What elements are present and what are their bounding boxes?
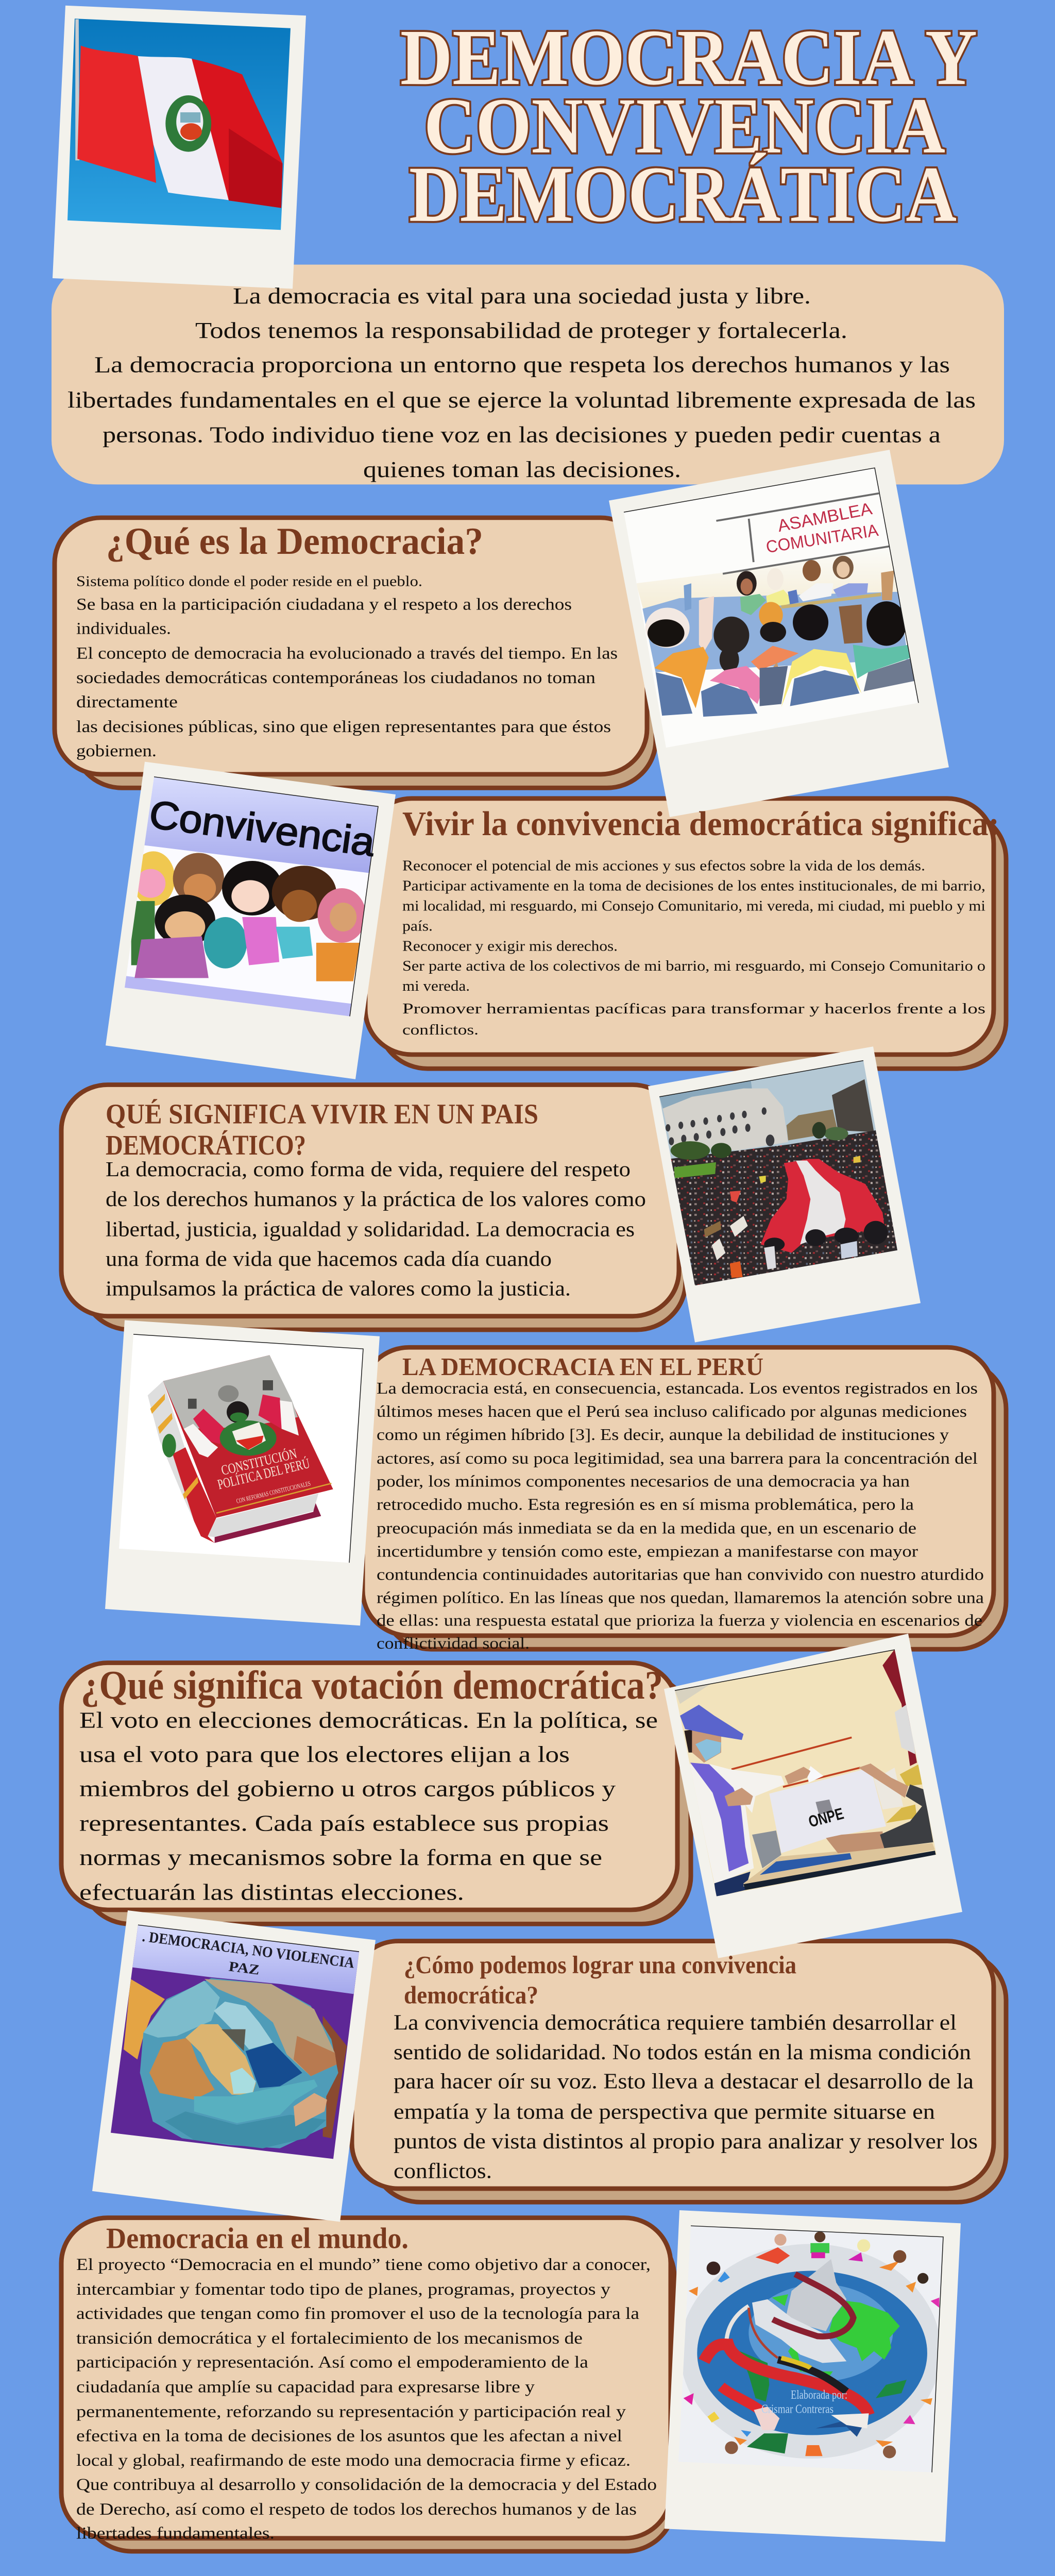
- text block: qué significa vivir: de los derechos humanos y la práctica de los valores como: [106, 1187, 646, 1211]
- text block: qué es la democracia: sociedades democráticas contemporáneas los ciudadanos no toman: [76, 669, 595, 687]
- heading: cómo lograr una convivencia democrática: ¿Cómo podemos lograr una convivencia: [404, 1951, 796, 1979]
- photo: asamblea comunitaria polaroid: [609, 450, 949, 817]
- heading: Qué significa vivir en un país democrático: QUÉ SIGNIFICA VIVIR EN UN PAIS: [106, 1098, 538, 1130]
- photo: ONPE voting polaroid: [664, 1634, 962, 1958]
- image text: elaborada por: Crismar Contreras: [761, 2402, 833, 2416]
- ballot box text: ONPE: ONPE: [806, 1804, 845, 1831]
- text block: la democracia en el Perú: de ellas: una respuesta estatal que prioriza la fuerza y violencia en escenarios de: [377, 1612, 982, 1629]
- text block: qué es la democracia: Se basa en la participación ciudadana y el respeto a los derechos: [76, 596, 572, 614]
- text block: qué significa vivir: libertad, justicia, igualdad y solidaridad. La democracia es: [106, 1217, 635, 1241]
- text block: qué es la democracia: gobiernen.: [76, 742, 157, 760]
- text block: democracia en el mundo: efectiva en la toma de decisiones de los asuntos que les afectan a nivel: [76, 2427, 622, 2445]
- book cover text: POLÍTICA DEL PERÚ: [216, 1455, 311, 1492]
- text block: intro: [67, 283, 976, 482]
- panel: democracia en el mundo card: [61, 2218, 674, 2551]
- panel: Qué significa vivir card: [61, 1084, 686, 1330]
- text block: la democracia en el Perú: últimos meses hacen que el Perú sea incluso calificado por algunas mediciones: [377, 1402, 967, 1420]
- text block: votación democrática: efectuarán las distintas elecciones.: [79, 1879, 464, 1905]
- text block: cómo lograr convivencia: conflictos.: [394, 2159, 492, 2183]
- text block: democracia en el mundo: actividades que tengan como fin promover el uso de la tecnología para la: [76, 2304, 639, 2323]
- photo: constitution book polaroid: [105, 1320, 380, 1625]
- text block: cómo lograr convivencia: puntos de vista distintos al propio para analizar y resolver los: [394, 2129, 978, 2154]
- text block: democracia en el mundo: de Derecho, así como el respeto de todos los derechos humanos y de las: [76, 2500, 637, 2519]
- text block: qué es la democracia: [76, 573, 618, 760]
- text block: vivir la convivencia: Ser parte activa de los colectivos de mi barrio, mi resguardo, mi Consejo Comunitario o: [402, 958, 985, 974]
- text block: cómo lograr convivencia: [394, 2011, 978, 2183]
- text block: democracia en el mundo: Que contribuya al desarrollo y consolidación de la democracia y del Estado: [76, 2475, 657, 2494]
- photo: Peruvian flag polaroid: [53, 6, 306, 289]
- text block: la democracia en el Perú: contundencia continuidades autoritarias que han convivido con nuestro aturdido: [377, 1566, 984, 1583]
- text block: qué significa vivir: La democracia, como forma de vida, requiere del respeto: [106, 1158, 631, 1181]
- title: [400, 13, 977, 238]
- text block: la democracia en el Perú: poder, los mínimos componentes necesarios de una democracia ya han: [377, 1472, 910, 1490]
- text block: democracia en el mundo: El proyecto “Democracia en el mundo” tiene como objetivo dar a conocer,: [76, 2256, 651, 2274]
- text block: la democracia en el Perú: La democracia está, en consecuencia, estancada. Los eventos registrados en los: [377, 1379, 978, 1397]
- text block: votación democrática: El voto en elecciones democráticas. En la política, se: [79, 1707, 658, 1733]
- text block: qué es la democracia: individuales.: [76, 620, 171, 638]
- text block: la democracia en el Perú: como un régimen híbrido [3]. Es decir, aunque la debilidad de instituciones y: [377, 1426, 949, 1444]
- panel: Vivir la convivencia card: [365, 799, 1006, 1069]
- text block: la democracia en el Perú: preocupación más inmediata se da en la medida que, en un escenario de: [377, 1519, 916, 1537]
- text block: democracia en el mundo: local y global, reafirmando de este modo una democracia firme y eficaz.: [76, 2451, 631, 2470]
- text block: democracia en el mundo: intercambiar y fomentar todo tipo de planes, programas, proyectos y: [76, 2280, 610, 2299]
- text block: qué significa vivir: impulsamos la práctica de valores como la justicia.: [106, 1277, 571, 1300]
- heading: Democracia en el mundo: Democracia en el mundo.: [106, 2223, 409, 2255]
- text block: cómo lograr convivencia: para hacer oír su voz. Esto lleva a destacar el desarrollo de la: [394, 2070, 974, 2094]
- text block: vivir la convivencia: Promover herramientas pacíficas para transformar y hacerlos frente a los: [402, 1001, 985, 1017]
- book cover text: CON REFORMAS CONSTITUCIONALES: [235, 1480, 311, 1505]
- text block: votación democrática: miembros del gobierno u otros cargos públicos y: [79, 1775, 616, 1801]
- text block: la democracia en el Perú: retrocedido mucho. Esta regresión es en sí misma problemática, pero la: [377, 1496, 914, 1514]
- book cover text: CONSTITUCIÓN: [219, 1445, 298, 1478]
- text block: democracia en el mundo: [76, 2256, 657, 2543]
- text block: vivir la convivencia: Participar activamente en la toma de decisiones de los entes institucionales, de mi barrio,: [402, 878, 985, 894]
- text block: democracia en el mundo: ciudadanía que amplíe su capacidad para expresarse libre y: [76, 2378, 535, 2396]
- text block: la democracia en el Perú: actores, así como su poca legitimidad, sea una barrera para la concentración del: [377, 1449, 978, 1467]
- text block: la democracia en el Perú: conflictividad social.: [377, 1635, 530, 1652]
- text block: intro: quienes toman las decisiones.: [363, 456, 681, 482]
- text block: qué significa vivir: [106, 1158, 646, 1300]
- heading: ¿Qué es la Democracia?: ¿Qué es la Democracia?: [106, 520, 483, 563]
- text block: intro: personas. Todo individuo tiene voz en las decisiones y pueden pedir cuentas a: [103, 422, 941, 447]
- text block: vivir la convivencia: mi vereda.: [402, 978, 470, 994]
- text block: votación democrática: normas y mecanismos sobre la forma en que se: [79, 1844, 602, 1870]
- text block: qué es la democracia: las decisiones públicas, sino que eligen representantes para que éstos: [76, 718, 611, 736]
- image text: elaborada por: Elaborada por:: [791, 2388, 847, 2402]
- text block: intro: Todos tenemos la responsabilidad de proteger y fortalecerla.: [195, 318, 847, 343]
- heading: La democracia en el Perú: LA DEMOCRACIA EN EL PERÚ: [402, 1352, 763, 1381]
- image text: Convivencia: Convivencia: [147, 792, 377, 865]
- heading: cómo lograr una convivencia democrática: democrática?: [404, 1981, 538, 2009]
- photo: protest crowd polaroid: [648, 1046, 921, 1342]
- image text: democracia no violencia paz: . DEMOCRACIA, NO VIOLENCIA: [141, 1928, 355, 1972]
- sign text: asamblea comunitaria: COMUNITARIA: [764, 521, 880, 557]
- text block: cómo lograr convivencia: sentido de solidaridad. No todos están en la misma condición: [394, 2041, 971, 2064]
- text block: cómo lograr convivencia: empatía y la toma de perspectiva que permite situarse en: [394, 2100, 935, 2124]
- panel: ¿Qué es la Democracia? card: [55, 518, 656, 788]
- photo: convivencia polaroid: [106, 762, 396, 1079]
- title: CONVIVENCIA: [424, 82, 945, 170]
- text block: vivir la convivencia: Reconocer y exigir mis derechos.: [402, 938, 618, 955]
- text block: democracia en el mundo: libertades fundamentales.: [76, 2524, 275, 2543]
- text block: la democracia en el Perú: incertidumbre y tensión como este, empiezan a manifestarse con mayor: [377, 1543, 918, 1560]
- text block: la democracia en el Perú: régimen político. En las líneas que nos quedan, llamaremos la atención sobre una: [377, 1589, 984, 1606]
- sign text: asamblea comunitaria: ASAMBLEA: [776, 499, 874, 536]
- text block: qué es la democracia: Sistema político donde el poder reside en el pueblo.: [76, 573, 422, 590]
- text block: democracia en el mundo: participación y representación. Así como el empoderamiento de la: [76, 2353, 588, 2372]
- panel: votación democrática card: [61, 1663, 691, 1924]
- heading: Qué significa votación democrática: ¿Qué significa votación democrática?: [81, 1664, 663, 1708]
- photo: hands polaroid: [92, 1910, 376, 2222]
- text block: democracia en el mundo: transición democrática y el fortalecimiento de los mecanismos de: [76, 2329, 583, 2348]
- book cover text: [216, 1445, 311, 1505]
- text block: vivir la convivencia: [402, 858, 985, 1038]
- text block: votación democrática: usa el voto para que los electores elijan a los: [79, 1741, 570, 1767]
- title: DEMOCRÁTICA: [409, 150, 957, 238]
- image text: elaborada por: [761, 2388, 847, 2416]
- title: DEMOCRACIA Y: [400, 13, 977, 101]
- photo: world peace polaroid: [665, 2210, 961, 2542]
- text block: intro: La democracia es vital para una sociedad justa y libre.: [233, 283, 811, 309]
- text block: vivir la convivencia: conflictos.: [402, 1022, 479, 1038]
- image text: democracia no violencia paz: PAZ: [228, 1958, 261, 1978]
- text block: la democracia en el Perú: [377, 1379, 984, 1652]
- heading: cómo lograr una convivencia democrática: [404, 1951, 796, 2009]
- panel: cómo lograr convivencia card: [352, 1941, 1006, 2202]
- text block: votación democrática: [79, 1707, 658, 1905]
- text block: qué significa vivir: una forma de vida que hacemos cada día cuando: [106, 1247, 552, 1270]
- text block: qué es la democracia: El concepto de democracia ha evolucionado a través del tiempo. En las: [76, 645, 618, 663]
- text block: qué es la democracia: directamente: [76, 693, 178, 711]
- text block: vivir la convivencia: Reconocer el potencial de mis acciones y sus efectos sobre la vida de los demás.: [402, 858, 925, 874]
- text block: intro: La democracia proporciona un entorno que respeta los derechos humanos y las: [94, 352, 950, 378]
- text block: intro: libertades fundamentales en el que se ejerce la voluntad libremente expresada de las: [67, 387, 976, 413]
- panel: La democracia en el Perú card: [363, 1347, 1006, 1649]
- heading: Qué significa vivir en un país democrático: [106, 1098, 538, 1161]
- text block: cómo lograr convivencia: La convivencia democrática requiere también desarrollar el: [394, 2011, 957, 2035]
- panel: intro background: [52, 265, 1004, 484]
- text block: votación democrática: representantes. Cada país establece sus propias: [79, 1810, 609, 1836]
- text block: democracia en el mundo: permanentemente, reforzando su representación y participación real y: [76, 2402, 626, 2421]
- sign text: asamblea comunitaria: [764, 499, 880, 557]
- text block: vivir la convivencia: mi localidad, mi resguardo, mi Consejo Comunitario, mi vereda, mi ciudad, mi pueblo y mi: [402, 898, 985, 914]
- text block: vivir la convivencia: país.: [402, 918, 433, 935]
- heading: Qué significa vivir en un país democrático: DEMOCRÁTICO?: [106, 1130, 306, 1161]
- heading: Vivir la convivencia democrática significa: Vivir la convivencia democrática significa:: [402, 805, 999, 843]
